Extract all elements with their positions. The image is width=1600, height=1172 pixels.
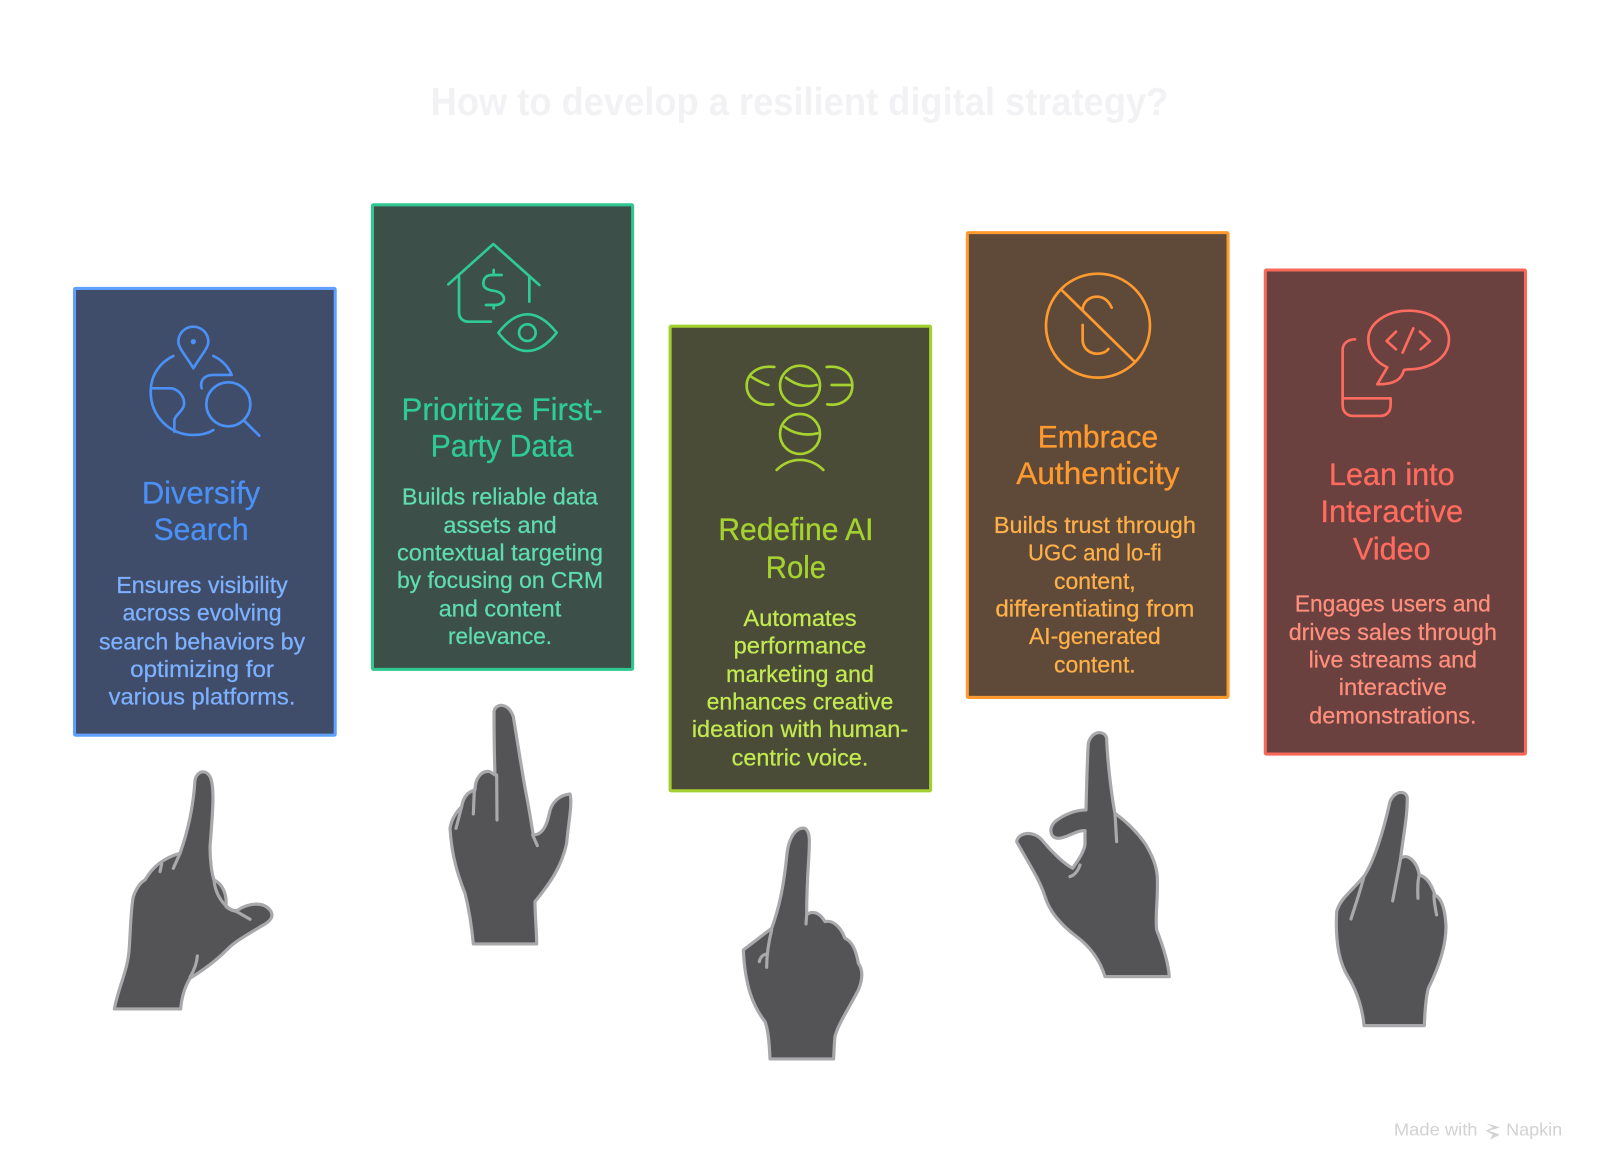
description: relevance. (448, 623, 552, 649)
icon: globe with pin and magnifier (151, 327, 259, 436)
description: optimizing for (130, 656, 274, 682)
description: contextual targeting (397, 539, 603, 565)
description: AI-generated (1029, 623, 1161, 649)
description: various platforms. (109, 683, 295, 709)
panel: Prioritize First-Party Data (372, 205, 633, 669)
panel: Embrace Authenticity (967, 233, 1228, 697)
description: performance (734, 632, 866, 658)
heading (1016, 419, 1180, 491)
description: assets and (443, 512, 557, 538)
description (692, 605, 908, 771)
description: centric voice. (732, 745, 868, 771)
description: Ensures visibility (116, 572, 288, 598)
description: marketing and (726, 661, 874, 687)
description: content, (1054, 568, 1136, 594)
heading: Interactive (1320, 494, 1463, 529)
icon: crossed-out C (1046, 274, 1150, 378)
panel: Redefine AI Role (670, 326, 931, 791)
heading (142, 475, 261, 547)
panel: Lean into Interactive Video (1265, 270, 1525, 754)
heading (1320, 457, 1463, 567)
heading: Embrace (1038, 419, 1158, 454)
description: content. (1054, 652, 1136, 678)
description (1289, 591, 1497, 729)
heading: Video (1353, 532, 1431, 567)
description (397, 483, 603, 649)
heading: Diversify (142, 475, 261, 510)
hand 3 pointing up at Redefine AI Role (743, 828, 862, 1059)
description: interactive (1339, 674, 1447, 700)
description: Builds reliable data (402, 483, 599, 509)
watermark: Made with Napkin (1394, 1120, 1562, 1140)
hand 2 pointing up at Prioritize First-Party Data (450, 705, 571, 944)
heading: Role (766, 550, 826, 585)
description: enhances creative (707, 688, 893, 714)
hand 1 pointing up at Diversify Search (114, 772, 272, 1009)
description: UGC and lo-fi (1028, 539, 1162, 565)
hand 4 pointing up at Embrace Authenticity (1017, 733, 1169, 977)
description: live streams and (1309, 647, 1477, 673)
icon: house with dollar and eye (448, 244, 557, 351)
icon: phone with code speech bubble (1343, 311, 1449, 416)
description: demonstrations. (1309, 703, 1477, 729)
panel: Diversify Search (75, 288, 335, 735)
heading: Prioritize First- (402, 392, 603, 427)
watermark: Made with Napkin: Made with (1394, 1120, 1478, 1140)
description: and content (439, 596, 562, 622)
description: Builds trust through (994, 512, 1196, 538)
heading: Redefine AI (718, 512, 873, 547)
watermark: Made with Napkin: Napkin (1506, 1120, 1562, 1140)
description: search behaviors by (99, 628, 305, 654)
description: Engages users and (1295, 591, 1491, 617)
description: ideation with human- (692, 716, 908, 742)
description: by focusing on CRM (397, 567, 603, 593)
hand 5 pointing up at Lean into Interactive Video (1336, 792, 1446, 1026)
icon: people with globe heads (747, 366, 852, 470)
heading (718, 512, 873, 585)
heading: Lean into (1329, 457, 1455, 492)
title: How to develop a resilient digital strategy? (431, 81, 1168, 124)
heading: Authenticity (1016, 456, 1180, 491)
description: Automates (743, 605, 857, 631)
heading: Search (154, 512, 248, 547)
description (994, 512, 1196, 678)
description: differentiating from (995, 596, 1194, 622)
heading (402, 392, 603, 464)
heading: Party Data (431, 429, 574, 464)
description: across evolving (122, 600, 282, 626)
description (99, 572, 305, 709)
description: drives sales through (1289, 619, 1497, 645)
